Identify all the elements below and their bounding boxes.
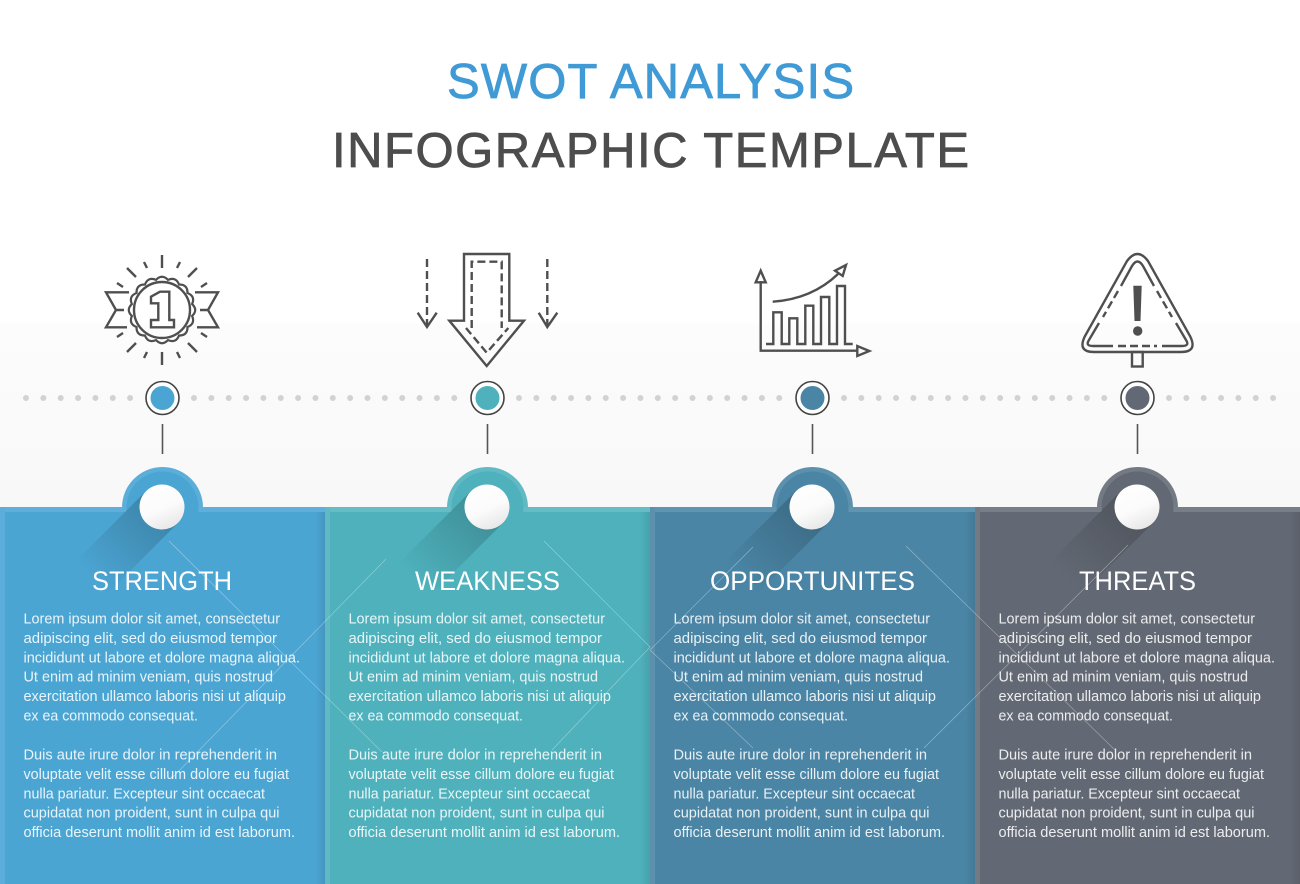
text block: opportunities: nulla pariatur. Excepteur sint occaecat [674,786,915,802]
icon: down arrows [418,254,557,366]
text block: strength: incididunt ut labore et dolore magna aliqua. [24,650,300,666]
heading: weakness: WEAKNESS [415,566,560,596]
marker: opportunities [796,382,829,454]
panel: weakness [325,467,650,884]
text block: strength [24,612,300,841]
icon: growth chart [756,265,869,356]
marker: weakness [471,382,504,454]
text block: strength: exercitation ullamco laboris nisi ut aliquip [24,689,286,705]
text block: weakness: incididunt ut labore et dolore magna aliqua. [348,650,625,666]
text block: opportunities: adipiscing elit, sed do eiusmod tempor [674,631,927,647]
text block: weakness: Duis aute irure dolor in reprehenderit in [348,748,602,764]
panel: threats [975,467,1300,884]
text block: weakness: nulla pariatur. Excepteur sint occaecat [348,786,590,802]
text block: opportunities: Duis aute irure dolor in reprehenderit in [674,748,927,764]
white ball: opportunities [790,484,834,530]
text block: strength: nulla pariatur. Excepteur sint occaecat [24,786,265,802]
text block: opportunities: cupidatat non proident, sunt in culpa qui [674,806,930,822]
title [332,55,969,178]
text block: threats: officia deserunt mollit anim id est laborum. [998,825,1270,841]
icon: warning sign [1082,254,1193,366]
text block: opportunities: ex ea commodo consequat. [674,708,848,724]
text block: strength: ex ea commodo consequat. [24,708,198,724]
text block: threats: Duis aute irure dolor in reprehenderit in [998,748,1252,764]
text block: strength: officia deserunt mollit anim id est laborum. [24,825,295,841]
text block: strength: cupidatat non proident, sunt in culpa qui [24,806,280,822]
panel: strength [0,467,325,884]
white ball: weakness [464,484,510,530]
marker: threats [1121,382,1154,454]
text block: weakness: adipiscing elit, sed do eiusmod tempor [348,631,602,647]
text block: threats: incididunt ut labore et dolore magna aliqua. [998,650,1275,666]
text block: opportunities: incididunt ut labore et dolore magna aliqua. [674,650,950,666]
text block: strength: Duis aute irure dolor in reprehenderit in [24,748,277,764]
text block: strength: Lorem ipsum dolor sit amet, consectetur [24,612,280,628]
text block: weakness: exercitation ullamco laboris nisi ut aliquip [348,689,611,705]
text block: weakness: cupidatat non proident, sunt in culpa qui [348,806,604,822]
white ball: threats [1114,484,1160,530]
text block: opportunities: voluptate velit esse cillum dolore eu fugiat [674,767,939,783]
text block: threats: exercitation ullamco laboris nisi ut aliquip [998,689,1261,705]
text block: weakness: Ut enim ad minim veniam, quis nostrud [348,670,598,686]
heading: threats: THREATS [1079,566,1196,596]
text block: strength: adipiscing elit, sed do eiusmod tempor [24,631,277,647]
text block: threats: nulla pariatur. Excepteur sint occaecat [998,786,1240,802]
text block: weakness: ex ea commodo consequat. [348,708,523,724]
panel: opportunities [650,467,975,884]
heading: strength: STRENGTH [92,566,232,596]
text block: strength: Ut enim ad minim veniam, quis nostrud [24,670,273,686]
text block: weakness: voluptate velit esse cillum dolore eu fugiat [348,767,614,783]
text block: threats: cupidatat non proident, sunt in culpa qui [998,806,1254,822]
text block: threats: Ut enim ad minim veniam, quis nostrud [998,670,1248,686]
text block: threats: Lorem ipsum dolor sit amet, consectetur [998,612,1255,628]
text block: opportunities: officia deserunt mollit anim id est laborum. [674,825,945,841]
text block: opportunities: exercitation ullamco laboris nisi ut aliquip [674,689,936,705]
dotted timeline [26,395,1274,401]
text block: threats: ex ea commodo consequat. [998,708,1173,724]
text block: threats: adipiscing elit, sed do eiusmod tempor [998,631,1252,647]
text block: weakness: Lorem ipsum dolor sit amet, consectetur [348,612,605,628]
text block: threats [998,612,1275,841]
text block: weakness [348,612,625,841]
icon: medal [106,255,218,365]
text block: opportunities [674,612,950,841]
heading: opportunities: OPPORTUNITES [710,566,915,596]
title: INFOGRAPHIC TEMPLATE [332,124,969,178]
text block: threats: voluptate velit esse cillum dolore eu fugiat [998,767,1264,783]
text block: strength: voluptate velit esse cillum dolore eu fugiat [24,767,289,783]
marker: strength [146,382,179,454]
white ball: strength [140,484,184,530]
text block: opportunities: Lorem ipsum dolor sit amet, consectetur [674,612,930,628]
title: SWOT ANALYSIS [447,55,854,109]
text block: weakness: officia deserunt mollit anim id est laborum. [348,825,620,841]
text block: opportunities: Ut enim ad minim veniam, quis nostrud [674,670,923,686]
